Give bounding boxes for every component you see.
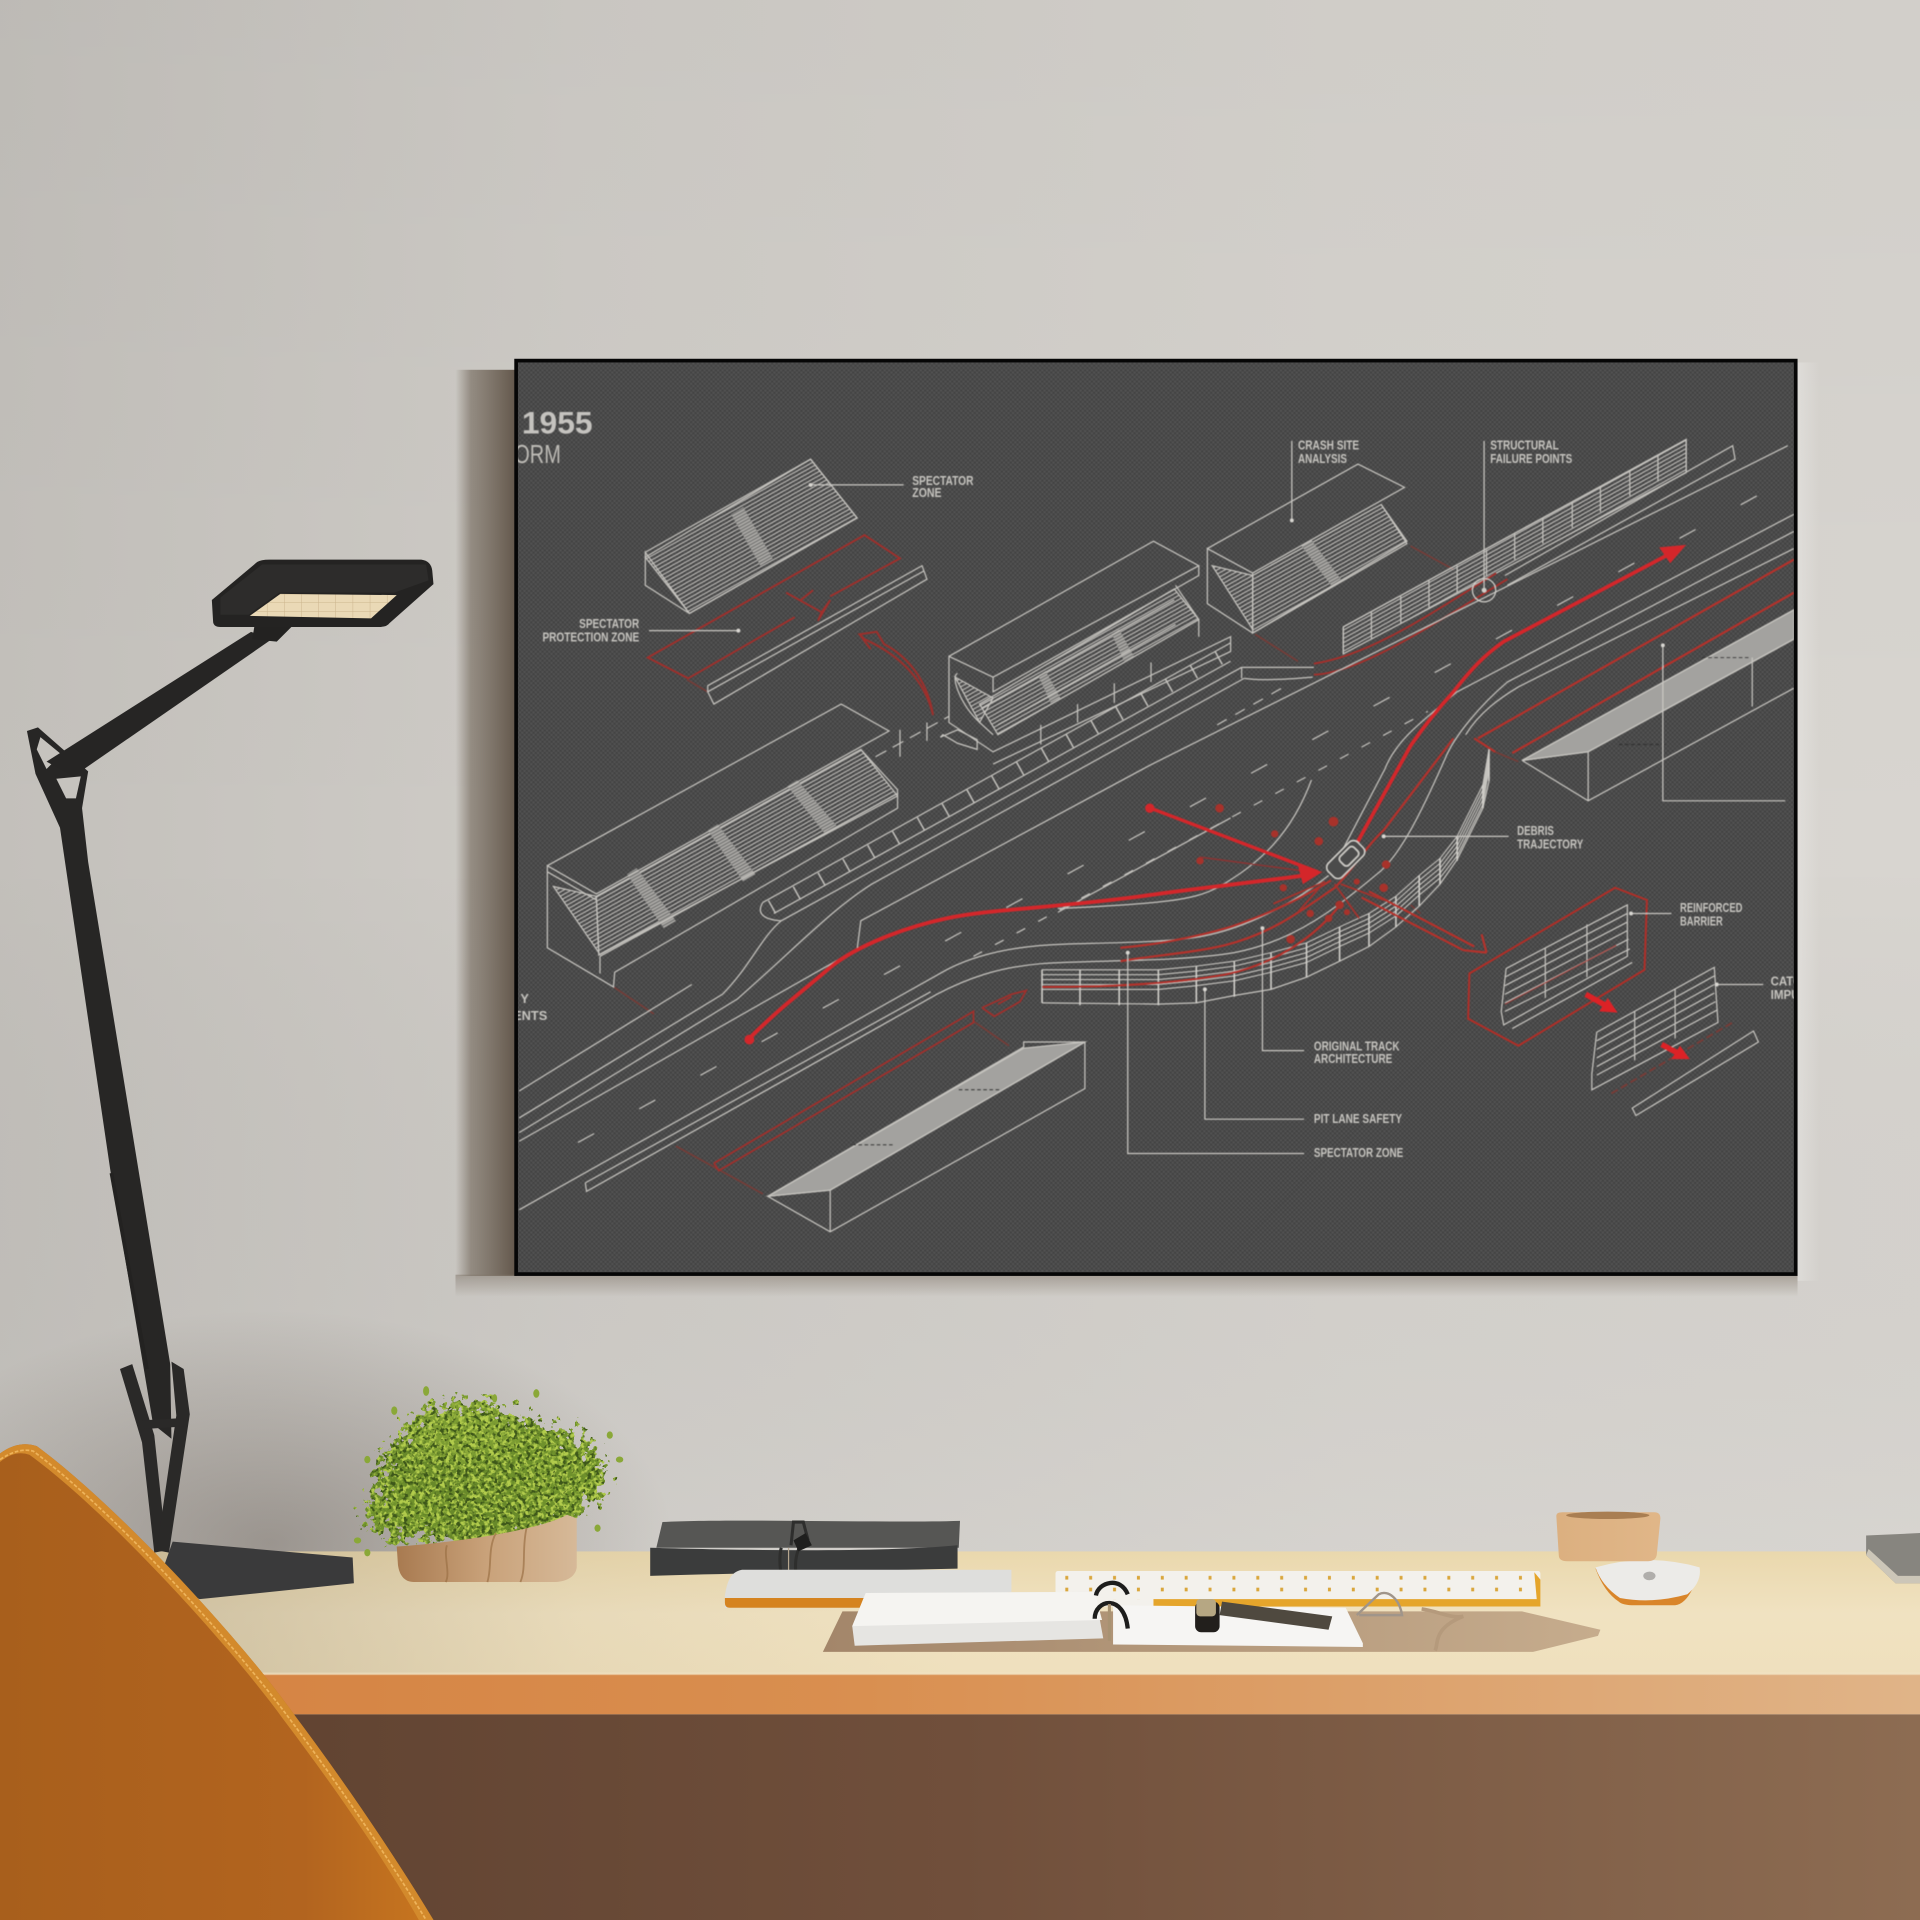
right page <box>1113 1605 1363 1647</box>
wooden cup <box>1556 1512 1660 1561</box>
poster drop shadow <box>456 362 1820 1297</box>
catch fence top right <box>1343 440 1735 654</box>
chair back <box>0 1444 433 1920</box>
labels: SPECTATOR ZONE <box>1314 1145 1404 1160</box>
building: centre stand <box>949 541 1231 764</box>
lamp base <box>159 1542 354 1599</box>
lamp yoke openings <box>37 737 81 798</box>
pit building window row <box>760 643 1231 921</box>
labels: STRUCTURAL <box>1490 437 1559 452</box>
stacked books right <box>1866 1533 1920 1583</box>
lamp column <box>27 727 171 1439</box>
pot <box>397 1515 577 1582</box>
red lane along fence <box>1314 573 1507 675</box>
lamp arm <box>47 632 272 776</box>
labels: REINFORCED <box>1680 900 1742 915</box>
leather book <box>650 1521 960 1576</box>
red impact curves <box>1042 560 1794 987</box>
labels: TRAJECTORY <box>1517 837 1584 852</box>
keyboard <box>1056 1571 1540 1607</box>
mouse <box>1596 1560 1700 1605</box>
D ring <box>1357 1593 1402 1615</box>
title: ORM <box>514 441 561 469</box>
desk lamp <box>27 560 433 1599</box>
grandstand: crash site stand <box>1207 464 1407 633</box>
lamp head <box>212 560 433 627</box>
car wreck <box>1324 838 1367 881</box>
connector dashes between stands <box>876 716 977 757</box>
reinforced barrier drawing <box>1501 905 1632 1029</box>
labels: ORIGINAL TRACK <box>1314 1039 1400 1054</box>
left pages <box>852 1592 1103 1646</box>
labels: BARRIER <box>1680 914 1723 929</box>
labels: ENTS <box>513 1008 548 1023</box>
labels: IMPULSE <box>1771 987 1822 1002</box>
scattered leaves <box>354 1386 623 1556</box>
poster artwork <box>513 404 1822 1232</box>
labels <box>513 437 1822 1160</box>
faint red connector lines <box>613 546 1518 1194</box>
debris trajectory arrows <box>744 545 1686 1044</box>
open binder <box>823 1583 1600 1652</box>
debris particles <box>1196 804 1390 943</box>
curved red arrow <box>860 632 933 715</box>
labels: SPECTATOR <box>579 616 640 631</box>
desk front edge <box>0 1674 1920 1714</box>
framed poster <box>513 359 1822 1276</box>
right bleacher <box>1522 610 1794 801</box>
impact arrow one <box>1586 994 1608 1007</box>
curved barrier <box>1042 749 1489 1005</box>
bottom bleacher <box>768 1042 1085 1232</box>
tablet <box>725 1570 1011 1608</box>
labels: CATCH <box>1771 974 1810 989</box>
foliage <box>365 1403 604 1549</box>
barrier detail: catch fence <box>1592 967 1758 1116</box>
red protection zone <box>648 535 900 678</box>
red pit lane safety zone <box>714 991 1026 1171</box>
red shadow band <box>1611 1022 1733 1093</box>
poster frame <box>514 359 1798 1276</box>
tension strut <box>111 1173 147 1369</box>
desk top surface <box>0 1551 1920 1676</box>
rail barrier top left <box>708 566 927 704</box>
grandstand: spectator zone upper left <box>645 459 857 613</box>
structural failure marker <box>1472 579 1496 602</box>
lamp lower yoke <box>120 1362 190 1553</box>
pen <box>1195 1599 1332 1632</box>
labels: PROTECTION ZONE <box>542 630 640 645</box>
title: 1955 <box>522 404 593 440</box>
leader lines <box>649 441 1785 1153</box>
labels: ARCHITECTURE <box>1314 1051 1393 1066</box>
labels: ZONE <box>912 485 942 500</box>
labels: SPECTATOR <box>912 473 974 488</box>
poster canvas <box>518 362 1794 1272</box>
under desk area <box>0 1714 1920 1920</box>
leather folio <box>823 1611 1600 1652</box>
labels: ANALYSIS <box>1298 451 1347 466</box>
desk <box>0 1551 1920 1920</box>
lamp head top face <box>220 564 429 615</box>
track lines <box>519 446 1794 1210</box>
title <box>518 411 592 464</box>
labels: PIT LANE SAFETY <box>1314 1111 1402 1126</box>
labels: CRASH SITE <box>1298 437 1360 452</box>
impact arrow two <box>1662 1044 1680 1054</box>
labels: DEBRIS <box>1517 823 1554 838</box>
barrier detail: reinforced <box>1468 888 1647 1046</box>
binder rings <box>1095 1583 1128 1641</box>
labels: FAILURE POINTS <box>1490 451 1573 466</box>
grandstand: large left stand <box>547 704 898 987</box>
labels: Y <box>520 991 529 1006</box>
arm to head connector <box>252 624 294 642</box>
potted plant <box>354 1386 623 1582</box>
lane dashes <box>578 484 1779 1142</box>
lamp light panel <box>250 594 397 618</box>
red hexagon outline <box>1468 888 1647 1046</box>
